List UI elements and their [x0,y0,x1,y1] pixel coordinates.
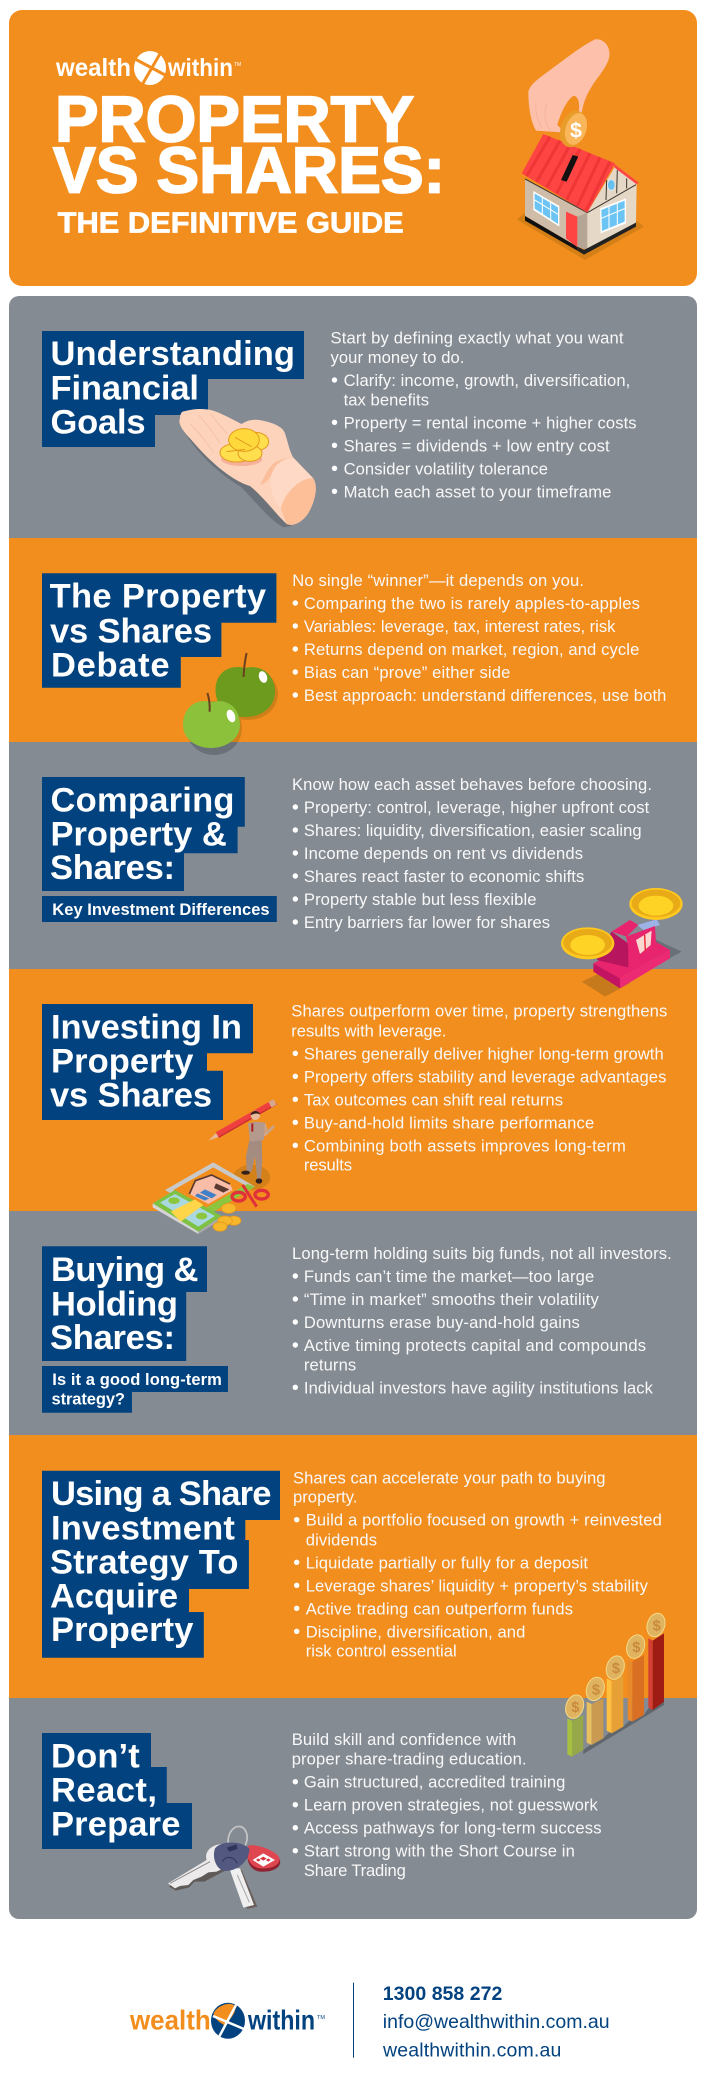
heading: Investment [51,1509,235,1547]
text: holding: “Time in market” smooths their volatility [304,1290,600,1309]
text: strategy: risk control essential [306,1642,457,1661]
title: THE DEFINITIVE GUIDE [58,208,404,240]
icon: green apples [183,653,278,755]
text: education: Gain structured, accredited training [304,1773,565,1792]
icon: hand dropping coin into house [517,39,644,260]
heading [42,331,304,447]
text: goals: Start by defining exactly what you want [330,328,624,347]
heading: Don’t [51,1737,140,1775]
footer contact details: 1300 858 272 [383,1983,502,2005]
text: holding: Funds can’t time the market—too large [304,1267,594,1286]
subheading: strategy? [52,1391,125,1409]
text: holding: returns [304,1355,356,1374]
heading [42,1471,280,1658]
text: strategy: dividends [306,1530,377,1549]
text: holding [292,1244,672,1397]
text: investing: Tax outcomes can shift real returns [304,1090,563,1109]
heading: Goals [50,403,146,441]
icon: weighing scale [561,888,683,997]
logo: wealth within: within [167,54,233,82]
heading: Holding [51,1285,178,1323]
heading [42,1733,192,1849]
panel: share strategy to acquire property [9,1435,697,1698]
heading: Investing In [51,1008,242,1046]
text: education: Build skill and confidence with [292,1730,516,1749]
subheading [42,896,277,922]
heading: Strategy To [50,1543,238,1581]
heading [42,573,276,688]
text: debate: Variables: leverage, tax, interest rates, risk [304,617,616,636]
heading: Prepare [51,1805,180,1843]
heading: The Property [50,578,266,616]
icon: coin bar chart: $ [653,1618,661,1634]
text: comparison [292,775,652,932]
heading: Understanding [50,335,295,373]
text: goals: Clarify: income, growth, diversification, [344,371,630,390]
logo: wealth within: wealth [55,54,131,82]
text: investing: Property offers stability and leverage advantages [304,1067,666,1086]
text: investing: Shares outperform over time, property strengthens [291,1002,667,1021]
text: investing [291,1002,667,1175]
text: strategy: Shares can accelerate your path to buying [293,1468,606,1487]
heading: Property [51,1043,193,1081]
heading: React, [51,1771,157,1809]
text: comparison: Know how each asset behaves before choosing. [292,775,652,794]
text: comparison: Shares: liquidity, diversification, easier scaling [304,821,642,840]
subheading [42,1366,228,1413]
heading: Debate [51,647,170,685]
text: education: Learn proven strategies, not guesswork [304,1796,599,1815]
panel: comparing property and shares [9,742,697,969]
text: strategy: Active trading can outperform funds [306,1599,573,1618]
text: holding: Downturns erase buy-and-hold gains [304,1313,580,1332]
text: goals: tax benefits [344,390,429,409]
text: investing: Shares generally deliver higher long-term growth [304,1044,664,1063]
icon: person with pencil, house, money [153,1102,277,1234]
heading [42,1246,207,1361]
heading: Property [51,1611,193,1649]
icon: hand dropping coin into house: $ [570,118,582,142]
heading [42,1004,253,1120]
heading: Shares: [50,849,175,887]
heading: Buying & [51,1251,198,1289]
text: debate: Best approach: understand differences, use both [304,686,666,705]
text: debate: Bias can “prove” either side [304,663,510,682]
icon: coin bar chart: $ [632,1640,640,1656]
title: PROPERTY [55,83,414,156]
panel: buying and holding shares [9,1211,697,1435]
text: goals [330,328,637,501]
heading: Acquire [50,1577,178,1615]
heading: vs Shares [50,1077,212,1115]
text: comparison: Income depends on rent vs dividends [304,844,583,863]
heading: Property & [50,815,227,853]
text: goals: your money to do. [330,348,464,367]
icon: coin bar chart: $ [571,1700,579,1716]
text: goals: Shares = dividends + low entry cost [344,436,610,455]
text: comparison: Entry barriers far lower for shares [304,913,550,932]
text: holding: Active timing protects capital and compounds [304,1336,646,1355]
heading [42,777,245,891]
icon: coin bar chart: $ [592,1682,600,1698]
text: debate: No single “winner”—it depends on you. [292,571,584,590]
logo: wealth within: TM [234,62,241,68]
text: education: Access pathways for long-term success [304,1819,602,1838]
icon: keys [168,1825,280,1909]
panel: understanding financial goals [9,296,697,538]
panel: don't react, prepare [9,653,697,1919]
footer logo: wealth [129,2004,211,2035]
text: investing: Buy-and-hold limits share performance [304,1113,594,1132]
text: strategy: property. [293,1488,358,1507]
title: VS SHARES: [53,134,445,207]
text: strategy: Discipline, diversification, and [306,1622,525,1641]
icon: hand holding coins [179,409,316,527]
text: goals: Property = rental income + higher costs [344,413,637,432]
text: investing: results [304,1156,352,1175]
text: investing: results with leverage. [291,1021,446,1040]
panel: investing in property vs shares [9,969,697,1211]
text: comparison: Property stable but less flexible [304,890,536,909]
text: debate: Returns depend on market, region, and cycle [304,640,639,659]
text: holding: Long-term holding suits big funds, not all investors. [292,1244,672,1263]
text: goals: Match each asset to your timeframe [344,482,611,501]
text: comparison: Property: control, leverage, higher upfront cost [304,798,650,817]
footer contact details: info@wealthwithin.com.au [383,2011,610,2033]
footer logo: within [247,2004,315,2035]
heading: Financial [50,369,199,407]
text: strategy: Leverage shares’ liquidity + property’s stability [306,1576,649,1595]
heading: vs Shares [50,612,212,650]
text: holding: Individual investors have agility institutions lack [304,1378,654,1397]
panel: property vs shares debate [9,538,697,742]
footer contact details [382,1983,610,2062]
text: education [292,1730,602,1880]
text: goals: Consider volatility tolerance [344,459,548,478]
footer contact details: wealthwithin.com.au [382,2040,561,2062]
logo: wealth within [55,51,241,85]
heading: Shares: [50,1319,175,1357]
text: strategy: Build a portfolio focused on growth + reinvested [306,1511,662,1530]
icon: coin bar chart [563,1611,668,1757]
subheading: Key Investment Differences [52,901,270,919]
text: strategy [293,1468,662,1661]
text: strategy: Liquidate partially or fully for a deposit [306,1553,588,1572]
title [53,83,445,240]
text: debate: Comparing the two is rarely apples-to-apples [304,594,640,613]
heading: Using a Share [51,1475,271,1513]
text: education: Start strong with the Short Course in [304,1842,575,1861]
panel: header [9,10,697,286]
text: education: proper share-trading education. [292,1750,527,1769]
subheading: Is it a good long-term [52,1371,222,1389]
heading: Comparing [50,781,234,819]
icon: coin bar chart: $ [612,1661,620,1677]
footer logo: TM [317,2015,325,2021]
footer logo [129,2003,325,2039]
text: debate [292,571,666,705]
text: education: Share Trading [304,1861,406,1880]
text: comparison: Shares react faster to economic shifts [304,867,584,886]
footer divider [353,1983,354,2058]
text: investing: Combining both assets improves long-term [304,1136,626,1155]
